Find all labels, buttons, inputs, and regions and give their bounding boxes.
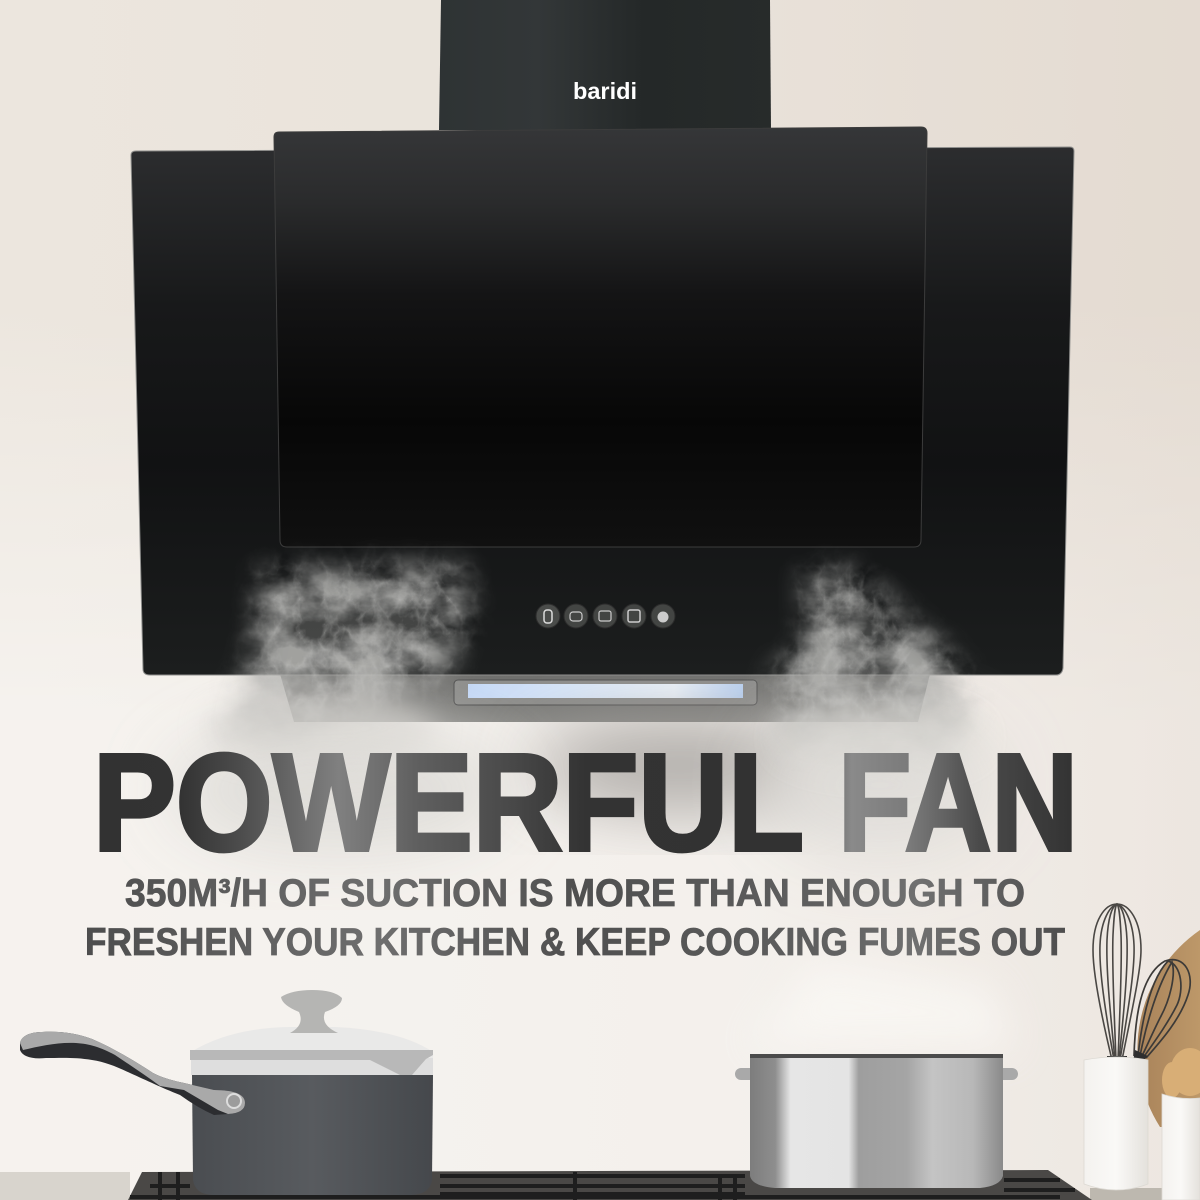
lid rim (190, 1050, 433, 1075)
stove top and grates (128, 1170, 1092, 1200)
pan upper rim misted (191, 1058, 433, 1075)
pot rim (750, 1054, 1003, 1058)
lid knob (281, 990, 342, 1033)
pot body (750, 1054, 1003, 1188)
whisk upright (1093, 904, 1141, 1060)
wooden spoons (1162, 1048, 1200, 1098)
right stock pot (735, 1054, 1018, 1188)
subheading (85, 872, 1065, 964)
brand logo: baridi (573, 78, 637, 104)
front glass panel (274, 127, 927, 547)
pan handle (20, 1032, 245, 1115)
control buttons (536, 604, 675, 628)
underside canopy (280, 674, 930, 722)
left saucepan (20, 990, 433, 1195)
range hood (131, 0, 1074, 722)
utensil holder with whisks (1084, 904, 1200, 1200)
subheading: FRESHEN YOUR KITCHEN & KEEP COOKING FUMES OUT (85, 921, 1065, 964)
subheading: 350M³/H OF SUCTION IS MORE THAN ENOUGH TO (125, 872, 1025, 915)
grey haze behind headline (170, 715, 1000, 855)
headline: POWERFUL (93, 726, 804, 880)
saucepan body (192, 1075, 433, 1195)
handle rivet (227, 1094, 241, 1108)
holder cup (1084, 1057, 1148, 1190)
pot side handles (735, 1068, 1018, 1080)
lid dome (191, 1027, 433, 1058)
chimney (439, 0, 771, 130)
whisk tilted (1134, 960, 1190, 1058)
steam above right pot (745, 960, 1015, 1050)
wooden board (1137, 930, 1200, 1127)
headline: FAN (838, 726, 1078, 880)
light bar (454, 680, 757, 705)
second holder (1162, 1094, 1200, 1200)
back glass panel (131, 147, 1074, 675)
smoke under hood (0, 500, 1200, 1000)
